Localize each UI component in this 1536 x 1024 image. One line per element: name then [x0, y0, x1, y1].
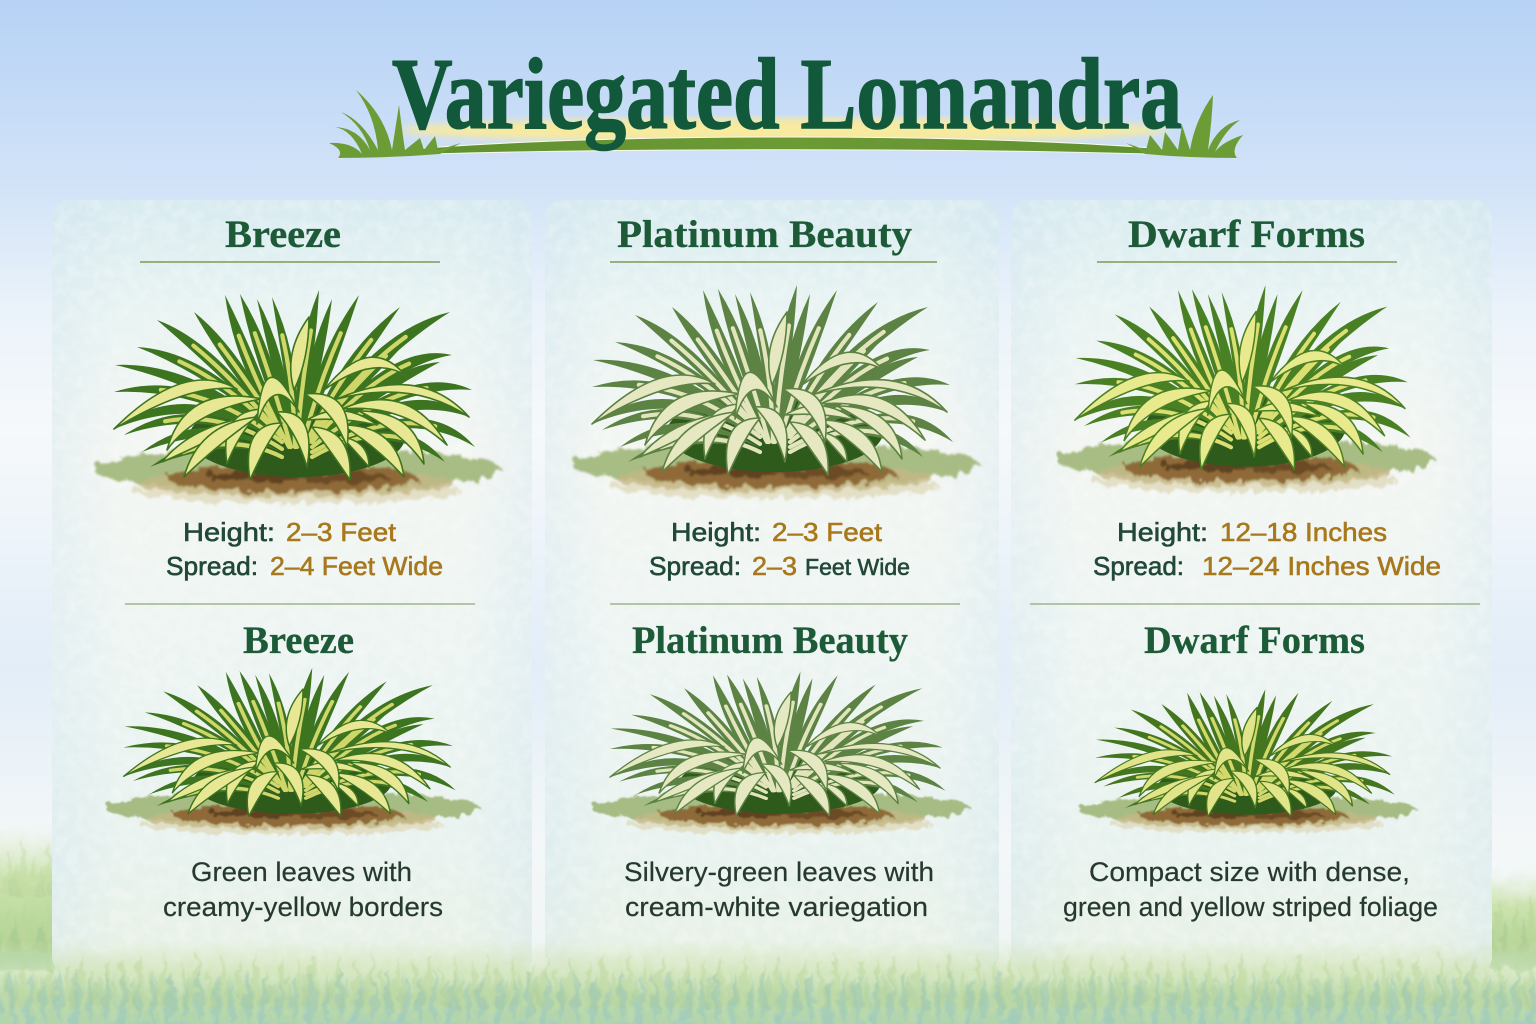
heading: Dwarf Forms: Dwarf Forms	[1128, 213, 1365, 256]
height stat	[671, 517, 883, 547]
heading: Breeze second: Breeze	[243, 619, 354, 662]
spread stat	[649, 551, 910, 581]
side grass behind panels	[0, 825, 1536, 970]
plant illustration: Dwarf small	[1078, 689, 1416, 832]
description	[1063, 857, 1438, 922]
heading: Dwarf Forms second: Dwarf Forms	[1144, 619, 1365, 662]
heading: Breeze: Breeze	[225, 213, 341, 256]
height stat: 12–18 Inches	[1220, 517, 1387, 547]
spread stat: Spread:	[166, 551, 258, 581]
height stat	[183, 517, 397, 547]
heading: Platinum Beauty: Platinum Beauty	[617, 213, 913, 256]
description: Silvery-green leaves with	[624, 857, 934, 887]
title glow	[400, 118, 1170, 142]
height stat: Height:	[671, 517, 761, 547]
right side grass	[1470, 870, 1536, 970]
plant illustration: Breeze small	[104, 668, 480, 834]
description	[163, 857, 443, 922]
spread stat: 12–24 Inches Wide	[1202, 551, 1441, 581]
panel: Platinum Beauty	[545, 200, 999, 975]
plant illustration: Platinum small	[590, 671, 970, 833]
spread stat: Feet Wide	[805, 554, 910, 580]
panel background	[545, 200, 999, 975]
panel background	[52, 200, 532, 975]
grass foreground	[0, 940, 1536, 1024]
plant illustration: Dwarf mature	[1055, 285, 1435, 492]
right grass tuft	[1126, 95, 1243, 158]
height stat	[1117, 517, 1387, 547]
height stat: Height:	[183, 517, 275, 547]
panel: Dwarf Forms	[1011, 200, 1492, 975]
title swoosh	[338, 137, 1237, 158]
description: green and yellow striped foliage	[1063, 892, 1438, 922]
height stat: 2–3 Feet	[286, 517, 397, 547]
spread stat: Spread:	[649, 551, 741, 581]
spread stat	[1093, 551, 1441, 581]
plant illustration: Platinum mature	[571, 285, 979, 498]
spread stat: 2–4 Feet Wide	[270, 551, 443, 581]
heading: Platinum Beauty second: Platinum Beauty	[632, 619, 908, 662]
description: Compact size with dense,	[1089, 857, 1410, 887]
height stat: Height:	[1117, 517, 1208, 547]
panel: Breeze	[52, 200, 532, 975]
description: Green leaves with	[191, 857, 412, 887]
panel background	[1011, 200, 1492, 975]
description: cream-white variegation	[625, 892, 928, 922]
height stat: 2–3 Feet	[772, 517, 883, 547]
left grass tuft	[329, 90, 461, 158]
plant illustration: Breeze mature	[93, 290, 501, 503]
spread stat: 2–3	[752, 551, 797, 581]
spread stat	[166, 551, 443, 581]
lower grass blades	[0, 968, 1536, 1024]
title text: Variegated Lomandra	[392, 38, 1182, 151]
left side grass	[0, 825, 70, 970]
bottom grass base	[0, 940, 1536, 1024]
description	[624, 857, 934, 922]
spread stat: Spread:	[1093, 551, 1184, 581]
title banner	[329, 38, 1243, 158]
grass blades	[0, 952, 1536, 1008]
description: creamy-yellow borders	[163, 892, 443, 922]
